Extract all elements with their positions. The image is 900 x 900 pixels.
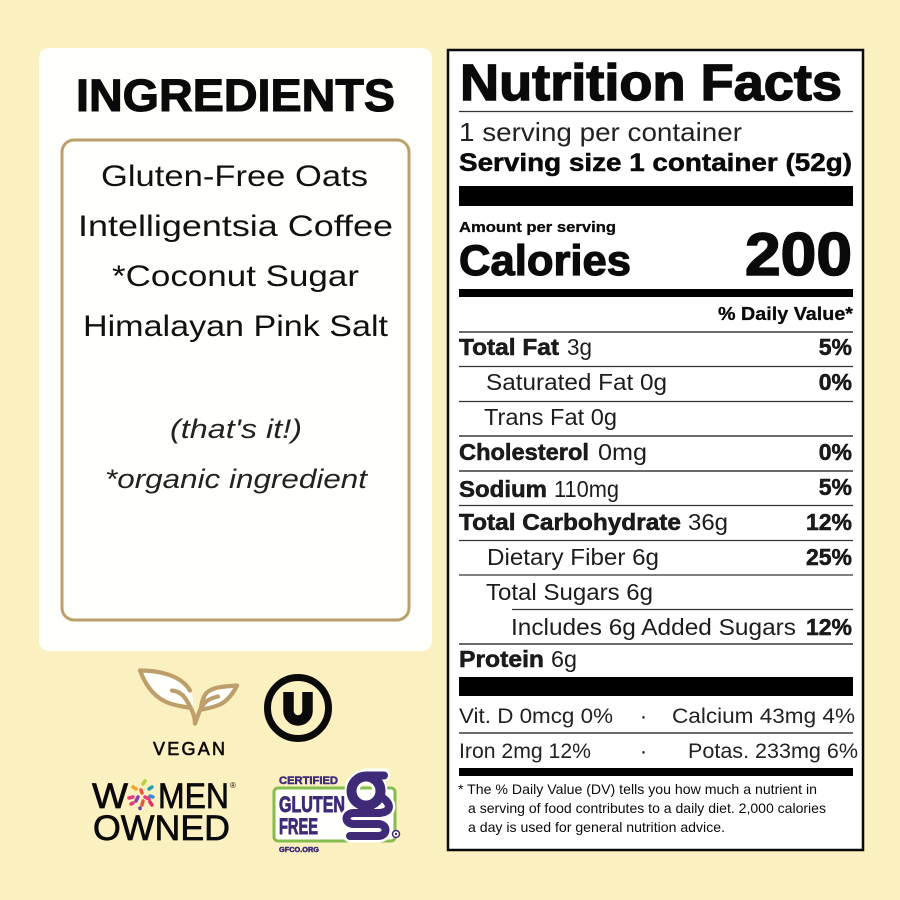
ingredient: coffee: Intelligentsia Coffee xyxy=(78,210,393,243)
heading: nutrition facts: Nutrition Facts xyxy=(460,54,842,111)
label: vegan: VEGAN xyxy=(153,739,225,759)
row: protein: Protein xyxy=(459,646,544,672)
logo: women owned xyxy=(92,777,236,848)
icon: kosher OU xyxy=(268,678,328,738)
row: protein: 6g xyxy=(551,646,577,672)
row: saturated fat xyxy=(486,369,852,395)
ingredients list box xyxy=(62,140,409,620)
row: added sugars: 12% xyxy=(806,614,852,640)
footnote: a day is used for general nutrition advice. xyxy=(468,819,725,835)
calories block: Calories xyxy=(459,237,631,285)
row: sodium: 110mg xyxy=(554,476,619,502)
ingredient: oats: Gluten-Free Oats xyxy=(101,160,368,193)
row: added sugars: Includes 6g Added Sugars xyxy=(511,614,796,640)
logo: certified gluten free xyxy=(274,775,400,854)
panel: nutrition facts xyxy=(448,50,863,850)
ingredient: salt: Himalayan Pink Salt xyxy=(83,310,389,343)
row: total sugars: Total Sugars 6g xyxy=(486,579,653,605)
row: saturated fat: Saturated Fat 0g xyxy=(486,369,667,395)
row: sodium: 5% xyxy=(819,474,852,500)
logo: women owned: W xyxy=(92,777,128,816)
row: trans fat: Trans Fat 0g xyxy=(484,404,617,430)
label: gfco.org: GFCO.ORG xyxy=(279,847,320,854)
vitamins and minerals: Potas. 233mg 6% xyxy=(688,740,858,763)
vitamins and minerals xyxy=(459,705,858,763)
calories block: 200 xyxy=(745,221,852,288)
row: total fat: 5% xyxy=(819,334,852,360)
vitamins and minerals: · xyxy=(640,705,647,728)
row: total carbohydrate xyxy=(459,509,852,535)
label: certified: CERTIFIED xyxy=(279,775,338,787)
footnote: * The % Daily Value (DV) tells you how much a nutrient in xyxy=(458,781,817,797)
calories block xyxy=(459,219,852,288)
calories block: Amount per serving xyxy=(459,219,616,236)
nutrient rows xyxy=(459,334,853,672)
vitamins and minerals: Iron 2mg 12% xyxy=(459,740,591,763)
logo: women owned: OWNED xyxy=(93,809,230,848)
row: total carbohydrate: Total Carbohydrate xyxy=(459,509,681,535)
serving text xyxy=(459,117,852,177)
vitamins and minerals: Calcium 43mg 4% xyxy=(672,705,855,728)
serving text: 1 serving per container xyxy=(459,117,742,147)
vitamins and minerals: Vit. D 0mcg 0% xyxy=(459,705,613,728)
note: organic ingredient: *organic ingredient xyxy=(105,464,369,494)
icon: g mark xyxy=(346,775,389,836)
row: saturated fat: 0% xyxy=(819,369,852,395)
row: cholesterol xyxy=(459,439,852,465)
row: dietary fiber xyxy=(487,544,852,570)
panel: ingredients xyxy=(39,48,432,651)
row: dietary fiber: 25% xyxy=(806,544,852,570)
footnote xyxy=(458,781,826,835)
row: sodium: Sodium xyxy=(459,476,547,502)
note: that's it: (that's it!) xyxy=(170,414,302,444)
label: gluten: GLUTEN xyxy=(279,792,345,817)
logo: women owned: MEN xyxy=(158,777,229,816)
row: total carbohydrate: 36g xyxy=(688,509,728,535)
row: dietary fiber: Dietary Fiber 6g xyxy=(487,544,659,570)
daily value header: % Daily Value* xyxy=(718,304,853,324)
footnote: a serving of food contributes to a daily diet. 2,000 calories xyxy=(468,800,826,816)
heading: ingredients: INGREDIENTS xyxy=(76,70,395,121)
row: sodium xyxy=(459,474,852,502)
ingredient: coconut sugar: *Coconut Sugar xyxy=(112,260,359,293)
icon: vegan leaves xyxy=(140,670,237,759)
serving text: Serving size 1 container (52g) xyxy=(459,149,852,177)
row: cholesterol: 0% xyxy=(819,439,852,465)
row: cholesterol: 0mg xyxy=(598,439,647,465)
row: total fat: Total Fat xyxy=(459,334,559,360)
icon: sprinkle O xyxy=(129,781,153,808)
row: protein xyxy=(459,646,577,672)
vitamins and minerals: · xyxy=(640,740,647,763)
label: registered xyxy=(392,830,400,838)
logo: women owned: ® xyxy=(230,781,236,790)
row: total fat: 3g xyxy=(567,334,592,360)
row: cholesterol: Cholesterol xyxy=(459,439,589,465)
label: free: FREE xyxy=(279,814,318,839)
row: total fat xyxy=(459,334,852,360)
row: total carbohydrate: 12% xyxy=(806,509,852,535)
